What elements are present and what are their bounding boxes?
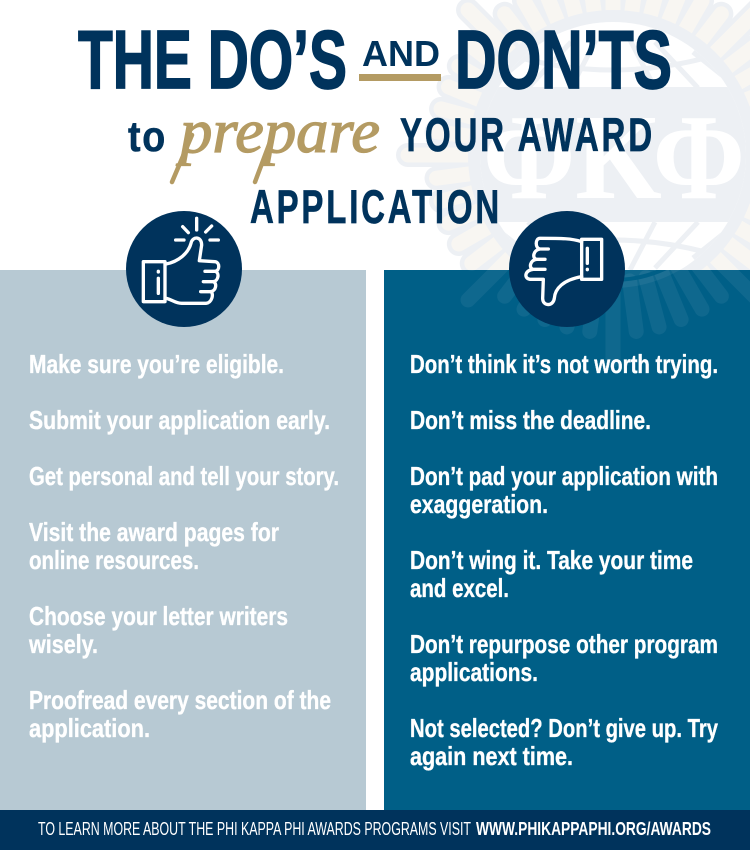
do: visit award pages: online resources. bbox=[29, 545, 199, 575]
panel: don'ts background bbox=[384, 270, 750, 810]
do: proofread: application. bbox=[29, 713, 150, 743]
do: letter writers: wisely. bbox=[28, 629, 98, 659]
panel: do's background bbox=[0, 270, 366, 810]
background seal watermark bbox=[396, 0, 750, 270]
do: visit award pages bbox=[29, 517, 279, 575]
subtitle: application: APPLICATION bbox=[250, 180, 502, 233]
subtitle: to: to bbox=[128, 113, 167, 161]
do: get personal: Get personal and tell your story. bbox=[29, 461, 339, 491]
do: letter writers: Choose your letter writers bbox=[29, 601, 288, 631]
footer bar bbox=[0, 810, 750, 850]
don't: pad application bbox=[410, 461, 718, 519]
don't: wing it: and excel. bbox=[410, 573, 509, 603]
don't: repurpose bbox=[410, 629, 718, 687]
don't: repurpose: applications. bbox=[410, 657, 538, 687]
don't: pad application: exaggeration. bbox=[410, 489, 548, 519]
title: and: AND bbox=[362, 33, 440, 74]
footer: call to action: TO LEARN MORE ABOUT THE PHI KAPPA PHI AWARDS PROGRAMS VISIT bbox=[38, 819, 471, 839]
subtitle: prepare in gold script: prepare bbox=[176, 98, 380, 166]
do: letter writers bbox=[28, 601, 288, 659]
don't: miss deadline: Don’t miss the deadline. bbox=[410, 405, 651, 435]
seal overlay on don'ts panel bbox=[460, 270, 750, 367]
do: visit award pages: Visit the award pages for bbox=[29, 517, 279, 547]
icon: thumbs down bbox=[509, 211, 625, 327]
don'ts list bbox=[410, 349, 718, 771]
don't: give up bbox=[410, 713, 718, 771]
don't: give up: again next time. bbox=[410, 741, 573, 771]
don't: wing it bbox=[410, 545, 693, 603]
do: eligible: Make sure you’re eligible. bbox=[29, 349, 284, 379]
title: gold underline bbox=[359, 74, 441, 81]
do: proofread bbox=[29, 685, 331, 743]
do: submit early: Submit your application early. bbox=[29, 405, 330, 435]
icon: thumbs up bbox=[126, 211, 242, 327]
do's list bbox=[28, 349, 339, 743]
title: the do's: THE DO’S bbox=[78, 13, 347, 106]
title bbox=[78, 13, 672, 106]
subtitle bbox=[128, 98, 655, 233]
do: proofread: Proofread every section of the bbox=[29, 685, 331, 715]
